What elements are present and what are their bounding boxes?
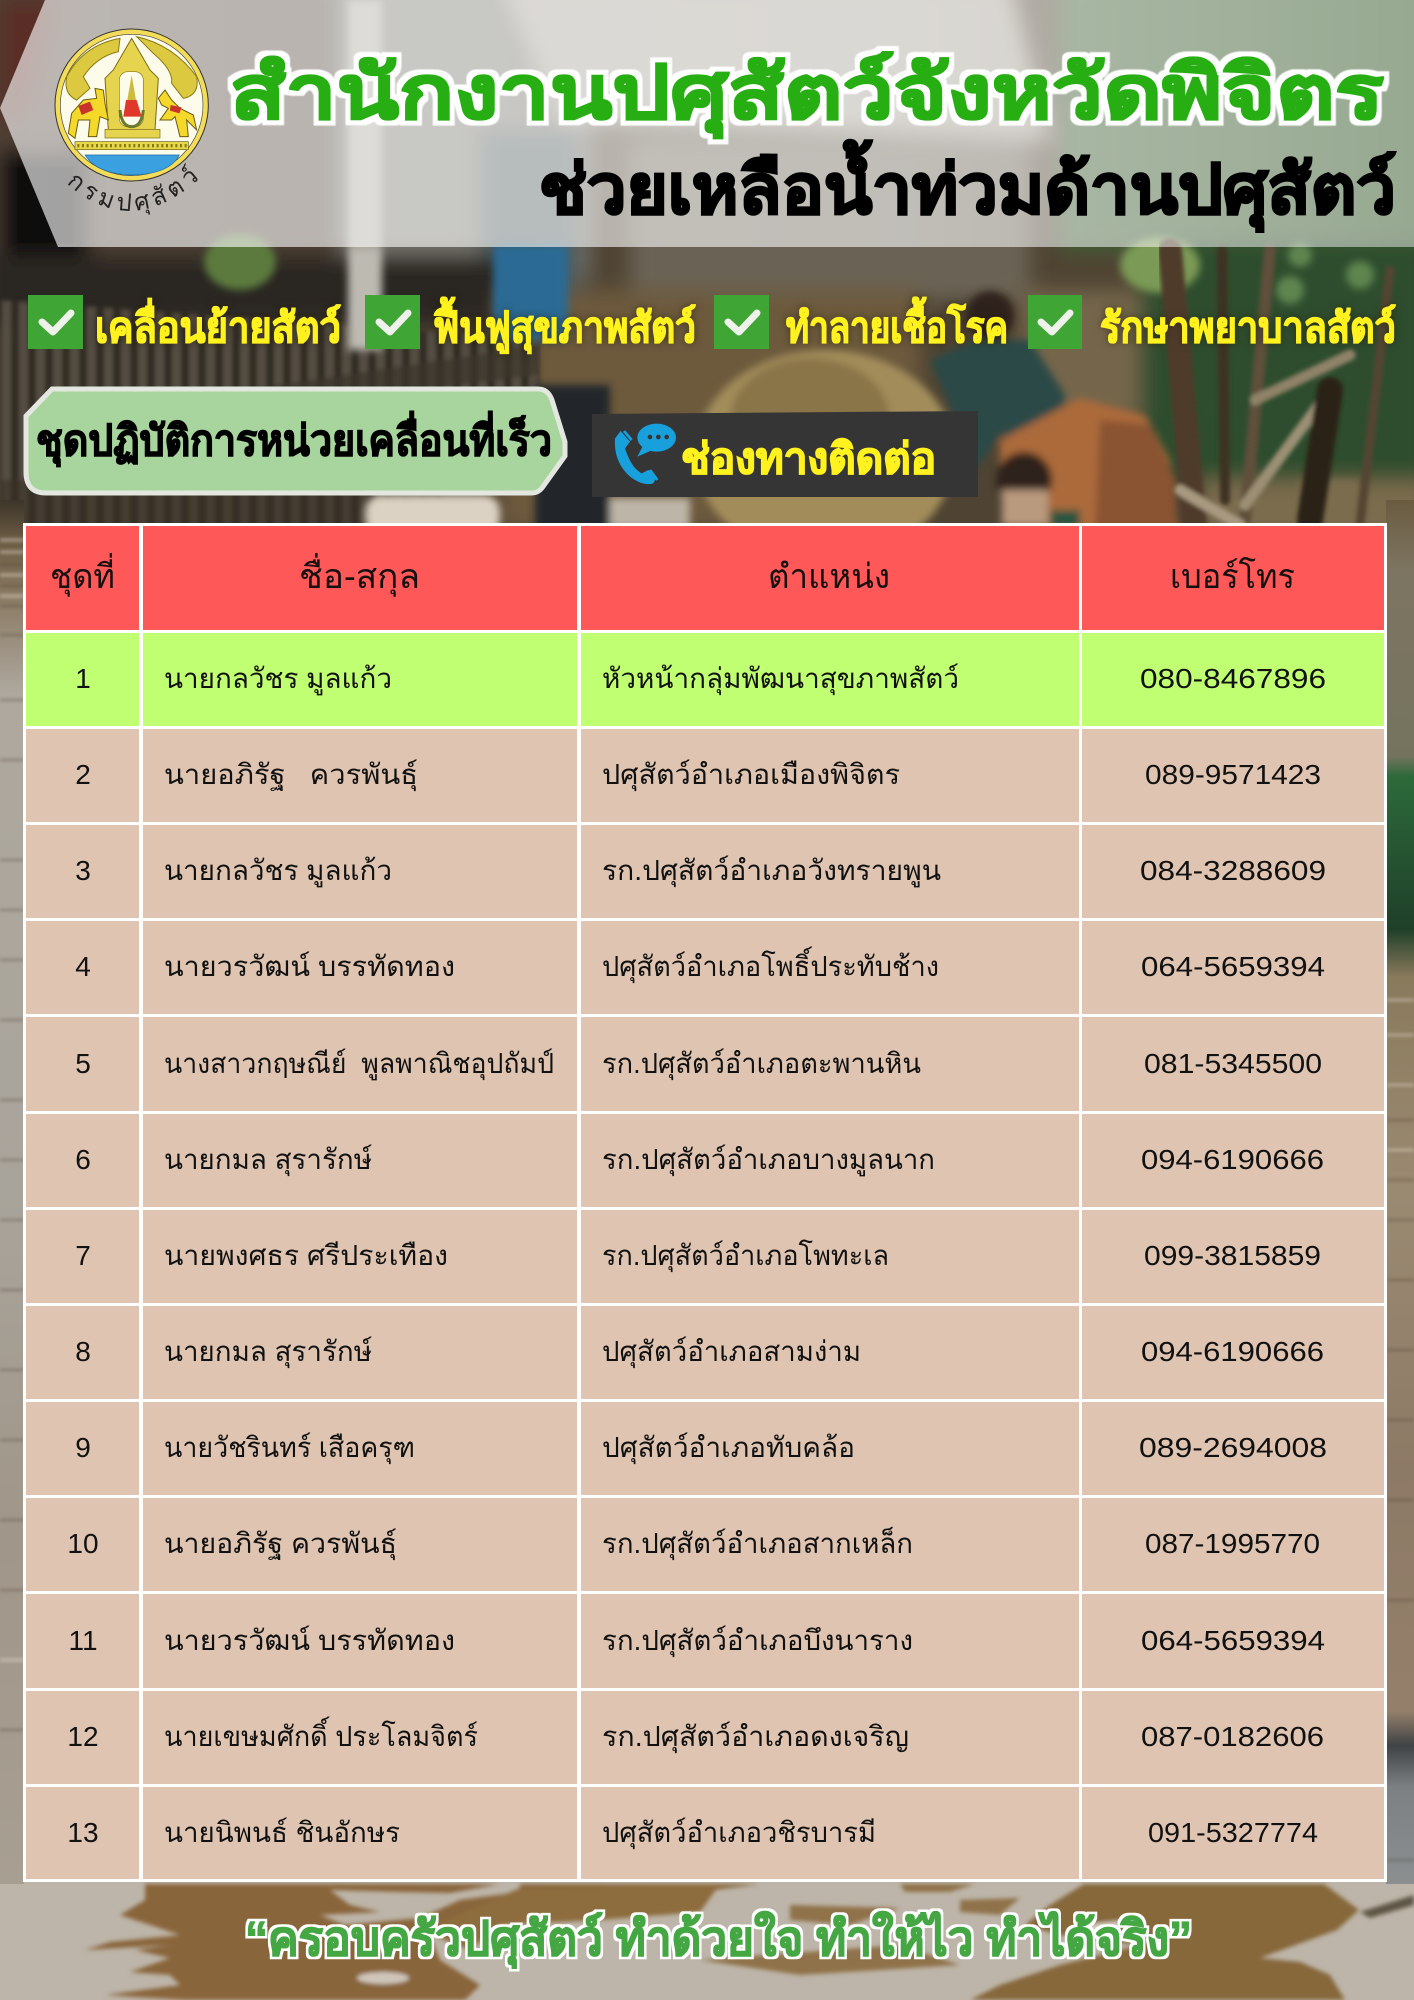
service: treat animals — [1028, 295, 1396, 351]
row 3 — [26, 825, 1384, 918]
service: restore animal health — [365, 295, 696, 354]
header banner — [0, 0, 1414, 247]
service: destroy pathogens: ทำลายเชื้อโรค — [786, 296, 1008, 351]
row 10: 087-1995770 — [1145, 1528, 1320, 1559]
row 5: รก.ปศุสัตว์อำเภอตะพานหิน — [602, 1048, 921, 1081]
row 1: นายกลวัชร มูลแก้ว — [164, 663, 392, 696]
row 9: 9 — [75, 1432, 91, 1463]
row 3: 3 — [75, 855, 91, 886]
row 7: 7 — [75, 1240, 91, 1271]
row 2: นายอภิรัฐ ควรพันธุ์ — [164, 759, 418, 792]
row 6: นายกมล สุรารักษ์ — [164, 1144, 373, 1177]
emblem caption: กรมปศุสัตว์ — [68, 163, 198, 215]
row 4: ปศุสัตว์อำเภอโพธิ์ประทับช้าง — [602, 946, 939, 984]
row 6: 6 — [75, 1144, 91, 1175]
row 3: นายกลวัชร มูลแก้ว — [164, 855, 392, 888]
table header row: ชื่อ-สกุล — [299, 553, 420, 597]
row 2 — [26, 729, 1384, 822]
row 9: ปศุสัตว์อำเภอทับคล้อ — [602, 1432, 855, 1465]
rapid response unit label: ชุดปฏิบัติการหน่วยเคลื่อนที่เร็ว — [36, 411, 552, 467]
row 11: 11 — [68, 1625, 98, 1656]
row 11: รก.ปศุสัตว์อำเภอบึงนาราง — [602, 1625, 913, 1658]
icon: phone with speech bubble — [615, 424, 676, 484]
slogan: “ครอบครัวปศุสัตว์ ทำด้วยใจ ทำให้ไว ทำได้จริง” — [245, 1910, 1192, 1969]
row 6: 094-6190666 — [1141, 1144, 1324, 1175]
row 7: 099-3815859 — [1144, 1240, 1321, 1271]
row 8 — [26, 1306, 1384, 1399]
service: destroy pathogens — [714, 295, 1008, 351]
row 8: นายกมล สุรารักษ์ — [164, 1336, 373, 1369]
row 5 — [26, 1017, 1384, 1111]
row 2: ปศุสัตว์อำเภอเมืองพิจิตร — [602, 759, 900, 792]
contact channels label — [592, 411, 978, 497]
service: move animals: เคลื่อนย้ายสัตว์ — [95, 298, 341, 351]
row 11: นายวรวัฒน์ บรรทัดทอง — [164, 1625, 455, 1656]
row 3: 084-3288609 — [1140, 855, 1326, 886]
row 8: 8 — [75, 1336, 91, 1367]
row 7 — [26, 1210, 1384, 1303]
contact table — [23, 523, 1387, 1882]
bottom water — [0, 1882, 1414, 2000]
service: move animals — [28, 295, 341, 351]
row 1: หัวหน้ากลุ่มพัฒนาสุขภาพสัตว์ — [602, 663, 959, 696]
row 1: 1 — [75, 663, 91, 694]
row 12: รก.ปศุสัตว์อำเภอดงเจริญ — [602, 1721, 909, 1754]
bamboo fence — [0, 300, 540, 540]
subtitle: ช่วยเหลือน้ำท่วมด้านปศุสัตว์ — [539, 139, 1396, 232]
row 10: 10 — [67, 1528, 99, 1559]
row 9: นายวัชรินทร์ เสือครุฑ — [164, 1432, 415, 1465]
row 8: 094-6190666 — [1141, 1336, 1324, 1367]
row 9 — [26, 1402, 1384, 1495]
table header row: ชุดที่ — [50, 553, 115, 597]
title: สำนักงานปศุสัตว์จังหวัดพิจิตร — [230, 51, 1384, 139]
row 12 — [26, 1691, 1384, 1784]
row 5: 081-5345500 — [1144, 1048, 1322, 1079]
services checklist — [28, 295, 1396, 354]
side water strips — [0, 500, 24, 1884]
row 13: 13 — [67, 1817, 99, 1848]
row 6 — [26, 1114, 1384, 1207]
row 5: นางสาวกฤษณีย์ พูลพาณิชอุปถัมป์ — [164, 1048, 554, 1081]
row 10 — [26, 1498, 1384, 1591]
table header row — [26, 526, 1384, 630]
row 3: รก.ปศุสัตว์อำเภอวังทรายพูน — [602, 855, 941, 888]
table header row: เบอร์โทร — [1170, 557, 1295, 596]
row 1 — [26, 633, 1384, 726]
service: restore animal health: ฟื้นฟูสุขภาพสัตว์ — [433, 296, 696, 354]
row 4 — [26, 921, 1384, 1014]
row 11: 064-5659394 — [1141, 1625, 1325, 1656]
row 12: 087-0182606 — [1141, 1721, 1324, 1752]
row 4: นายวรวัฒน์ บรรทัดทอง — [164, 951, 455, 982]
row 6: รก.ปศุสัตว์อำเภอบางมูลนาก — [602, 1144, 935, 1177]
row 7: นายพงศธร ศรีประเทือง — [164, 1240, 448, 1271]
contact channels label: ช่องทางติดต่อ — [681, 435, 936, 482]
row 9: 089-2694008 — [1139, 1432, 1327, 1463]
row 5: 5 — [75, 1048, 91, 1079]
row 2: 2 — [75, 759, 91, 790]
row 13: ปศุสัตว์อำเภอวชิรบารมี — [602, 1817, 876, 1850]
row 4: 064-5659394 — [1141, 951, 1325, 982]
row 12: นายเขษมศักดิ์ ประโลมจิตร์ — [164, 1716, 478, 1752]
emblem: Department of Livestock Development seal — [54, 28, 209, 215]
row 1: 080-8467896 — [1140, 663, 1326, 694]
row 2: 089-9571423 — [1145, 759, 1321, 790]
row 10: รก.ปศุสัตว์อำเภอสากเหล็ก — [602, 1526, 913, 1561]
row 13: 091-5327774 — [1148, 1817, 1318, 1848]
row 13 — [26, 1787, 1384, 1879]
row 13: นายนิพนธ์ ชินอักษร — [164, 1817, 400, 1848]
rapid response unit label — [26, 389, 565, 493]
table header row: ตำแหน่ง — [768, 558, 890, 596]
row 7: รก.ปศุสัตว์อำเภอโพทะเล — [602, 1239, 889, 1273]
row 4: 4 — [75, 951, 91, 982]
row 8: ปศุสัตว์อำเภอสามง่าม — [602, 1336, 861, 1369]
row 12: 12 — [67, 1721, 99, 1752]
row 10: นายอภิรัฐ ควรพันธุ์ — [164, 1528, 397, 1561]
row 11 — [26, 1594, 1384, 1688]
